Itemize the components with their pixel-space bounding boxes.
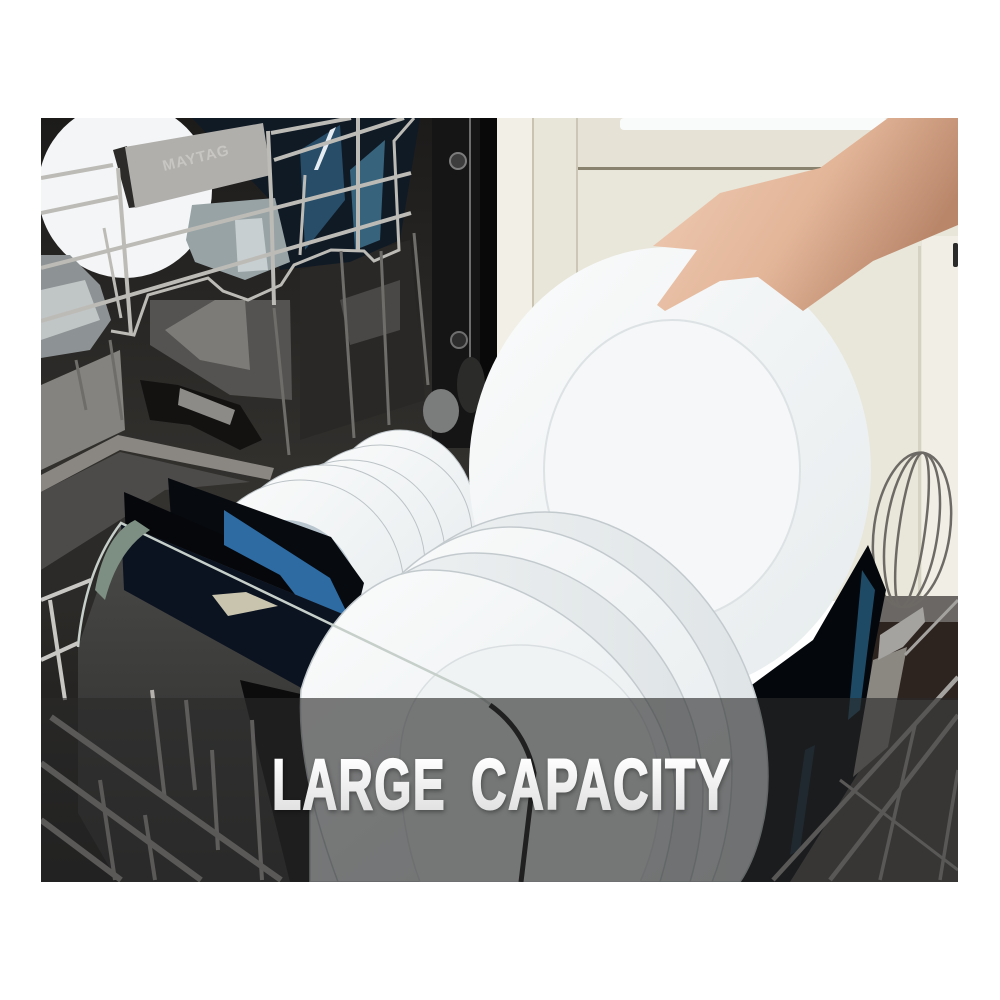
blue dish behind plates <box>730 545 886 882</box>
blue dishes in top rack <box>192 118 420 270</box>
dark blue baking dishes <box>124 478 364 614</box>
spoons <box>423 357 485 433</box>
infographic canvas <box>41 118 958 882</box>
steel tub reflections <box>41 280 400 570</box>
maytag rack handle <box>113 123 271 208</box>
clear glass baking dish body <box>78 523 345 882</box>
glass dish dark rim <box>490 705 534 882</box>
lower rack wires left <box>41 580 91 700</box>
caption: LARGE <box>272 746 446 825</box>
upper rack wires <box>41 118 414 335</box>
caption <box>272 746 731 825</box>
door side panel <box>432 118 498 448</box>
glass dish corner highlight <box>95 520 150 600</box>
whisk <box>872 451 952 596</box>
front plates stack <box>300 512 768 882</box>
lower rack tines <box>152 690 262 880</box>
lower tub rods <box>76 233 428 455</box>
utensil basket <box>853 607 925 777</box>
white bowl upper left <box>41 118 212 278</box>
photo: dishwasher being loaded <box>38 102 960 882</box>
lower rack right <box>773 600 958 880</box>
hero plate <box>469 247 871 693</box>
rear plates row <box>236 430 476 595</box>
dishwasher tub interior <box>41 118 501 882</box>
pan reflection on tub floor <box>140 380 262 450</box>
cream cabinets <box>497 118 958 601</box>
front plate inner well <box>400 645 660 882</box>
glass dish rim <box>76 521 491 706</box>
lower rack bars left <box>41 717 281 880</box>
translucent caption band <box>41 698 958 882</box>
caption: CAPACITY <box>471 746 731 825</box>
rear plate inner well <box>284 520 352 566</box>
dark counter <box>790 596 958 882</box>
maytag rack handle: MAYTAG <box>161 142 231 175</box>
glasses in top rack <box>41 198 290 358</box>
hand <box>653 118 958 311</box>
